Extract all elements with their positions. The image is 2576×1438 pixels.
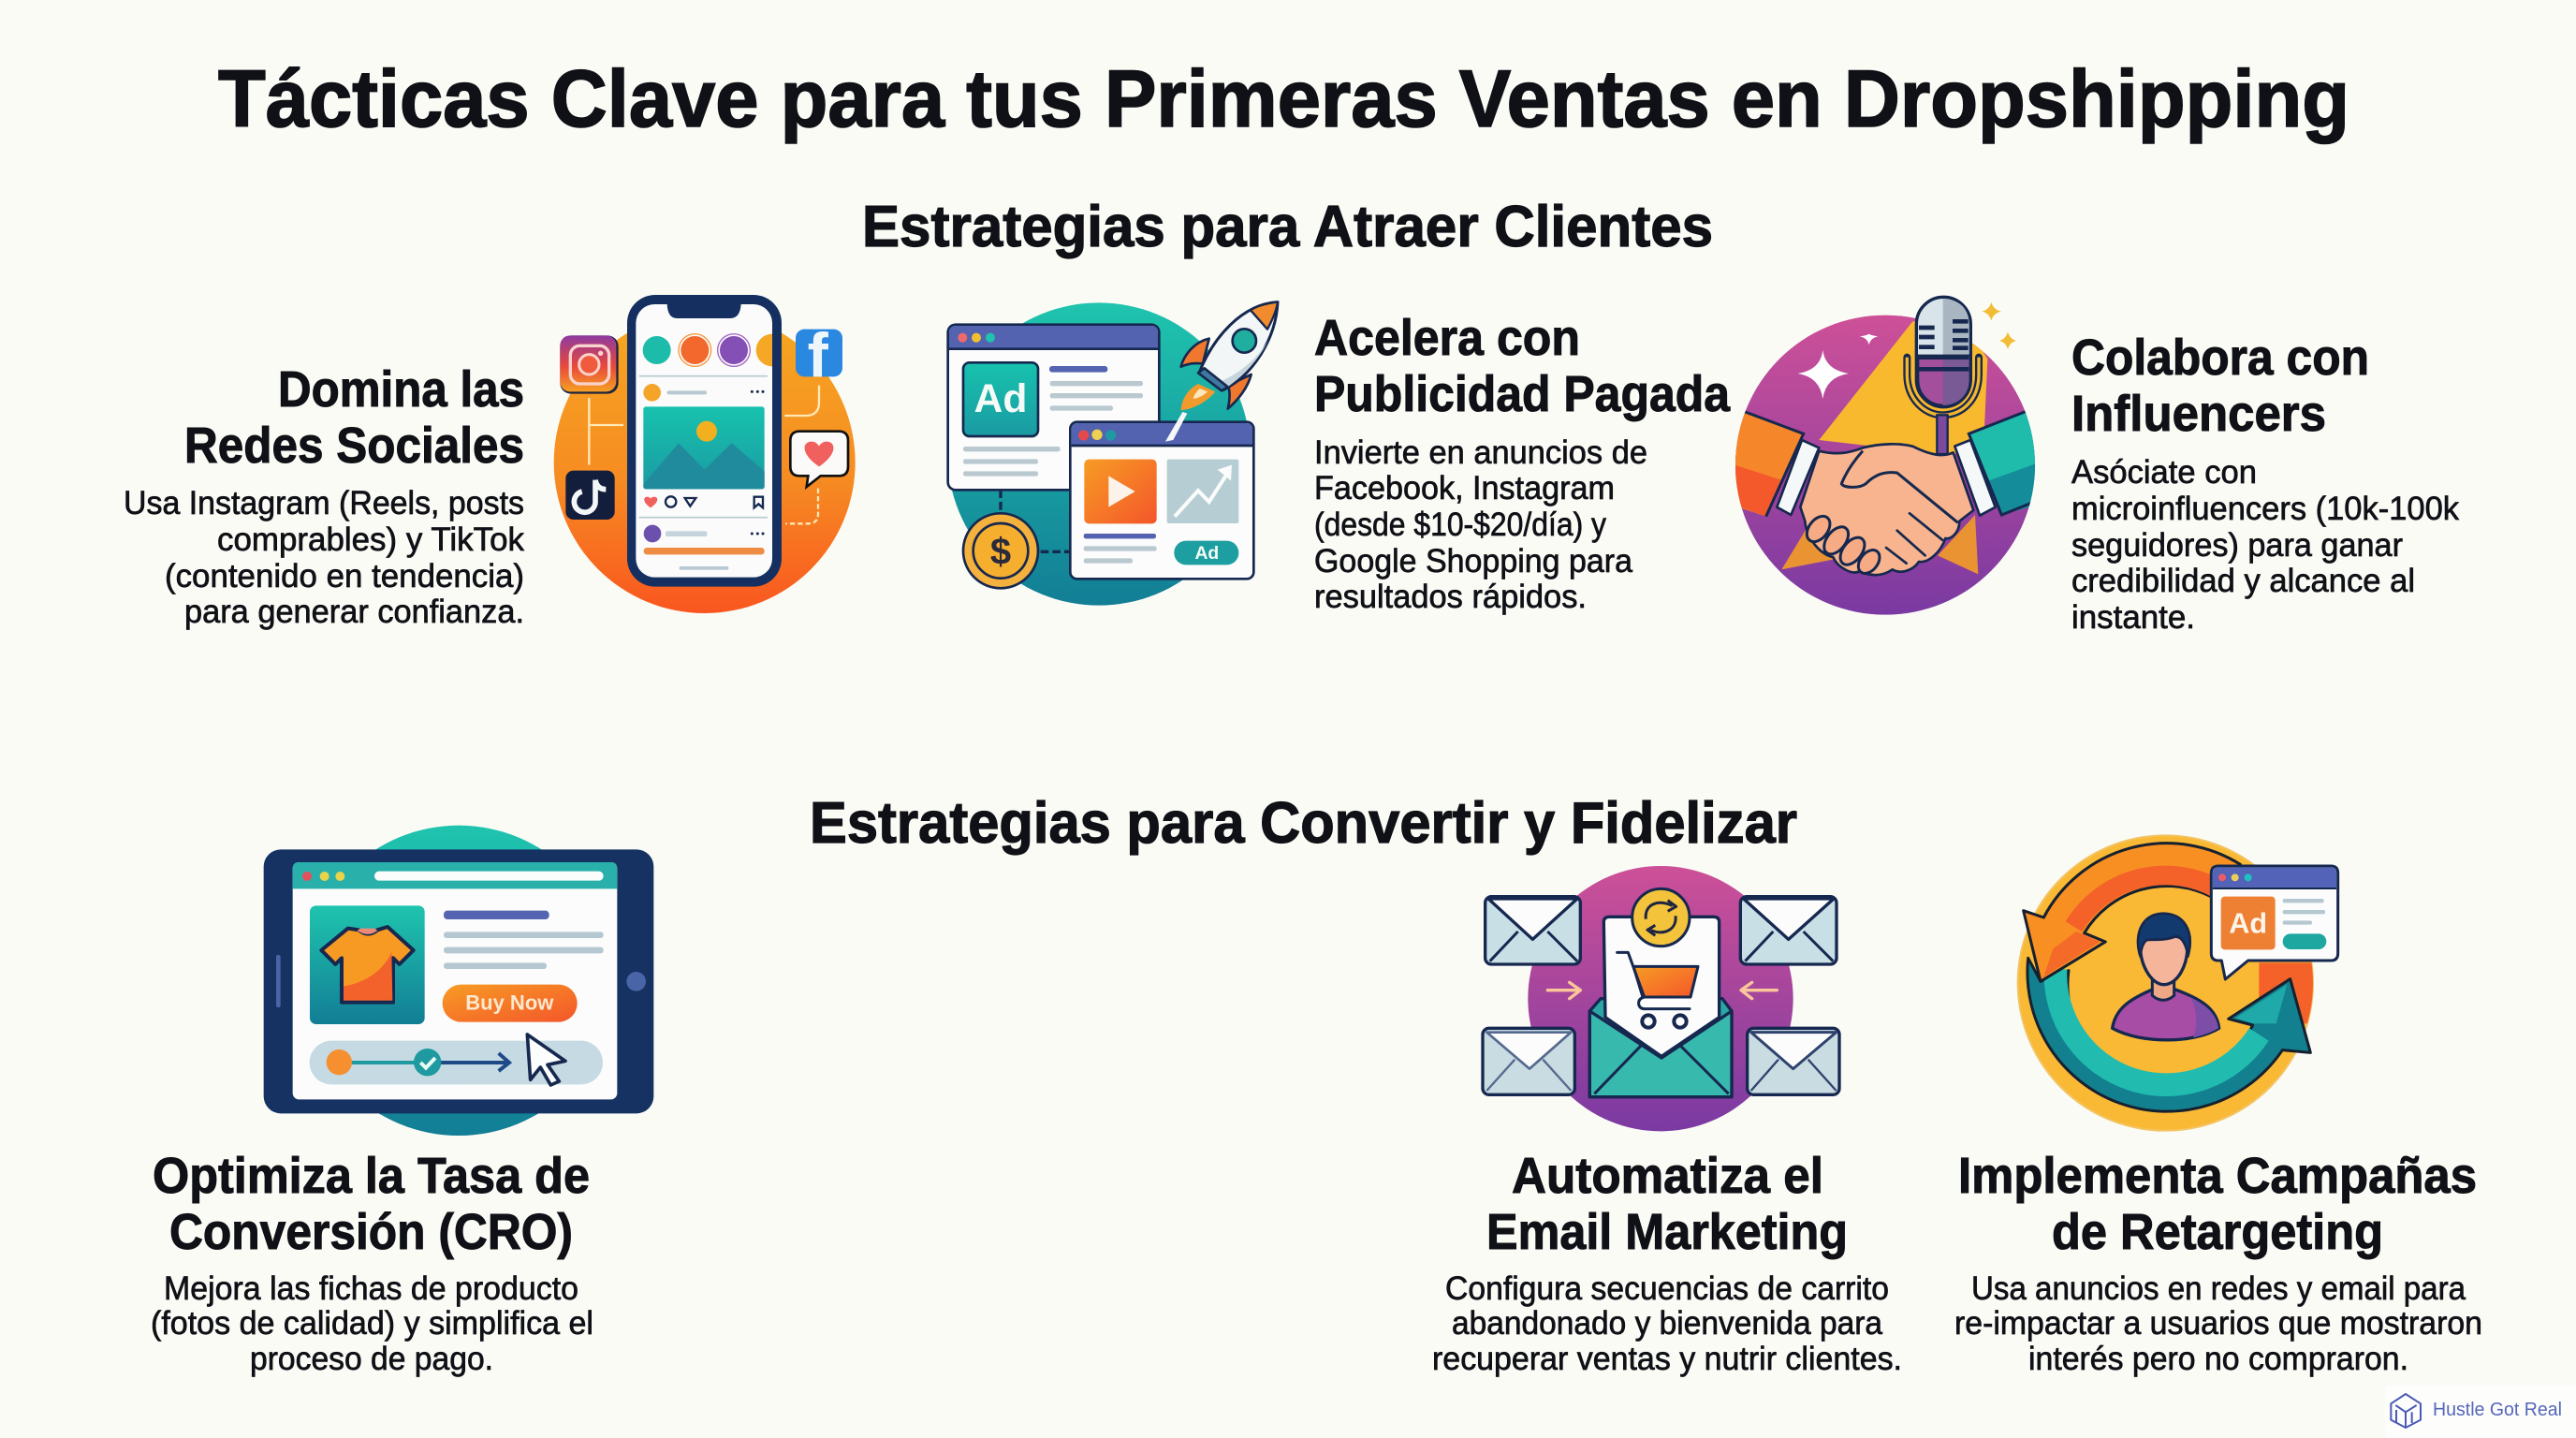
panel: publicidad pagada: [947, 302, 1731, 615]
body text: resultados rápidos.: [1314, 579, 1587, 615]
panel: retargeting: [1954, 835, 2482, 1377]
heading: [1486, 1148, 1848, 1260]
panel: influencers: [1729, 297, 2459, 636]
body text: (contenido en tendencia): [165, 558, 524, 594]
body text: (fotos de calidad) y simplifica el: [151, 1305, 593, 1342]
body text: para generar confianza.: [184, 594, 524, 630]
body text: Usa anuncios en redes y email para: [1971, 1270, 2466, 1307]
heading: de Retargeting: [2052, 1204, 2383, 1260]
heading: [2071, 330, 2369, 442]
icon: ad windows with rocket and coin: $: [990, 532, 1011, 573]
watermark text: Hustle Got Real: [2433, 1400, 2562, 1420]
icon: handshake with microphone: [1729, 297, 2041, 615]
body text: [124, 485, 524, 630]
icon: ad windows with rocket and coin: Ad: [1194, 544, 1219, 564]
section heading: atraer clientes: Estrategias para Atraer Clientes: [862, 195, 1713, 259]
body text: recuperar ventas y nutrir clientes.: [1432, 1341, 1902, 1377]
panel: email marketing: [1432, 866, 1902, 1377]
body text: [1432, 1270, 1902, 1377]
body text: (desde $10-$20/día) y: [1314, 506, 1606, 543]
body text: comprables) y TikTok: [217, 521, 524, 558]
heading: Optimiza la Tasa de: [153, 1148, 590, 1204]
icon: cube logo: [2391, 1394, 2421, 1428]
icon: retargeting loop around user with ad: [2018, 835, 2338, 1131]
body text: Facebook, Instagram: [1314, 470, 1615, 506]
heading: [1958, 1148, 2477, 1260]
heading: [1314, 310, 1731, 422]
body text: [1314, 434, 1647, 615]
heading: Automatiza el: [1512, 1148, 1823, 1204]
panel: optimiza CRO: [151, 826, 653, 1377]
icon: smartphone with social networks: f: [808, 321, 829, 390]
body text: Asóciate con: [2071, 454, 2257, 491]
heading: Email Marketing: [1486, 1204, 1848, 1260]
icon: smartphone with social networks: [554, 295, 856, 613]
icon: tablet with product page: Buy Now: [465, 991, 554, 1015]
heading: Influencers: [2071, 386, 2326, 442]
icon: retargeting loop around user with ad: Ad: [2229, 908, 2267, 940]
body text: Google Shopping para: [1314, 543, 1633, 580]
icon: tablet with product page: [264, 826, 653, 1136]
body text: re-impactar a usuarios que mostraron: [1954, 1305, 2482, 1342]
icon: ad windows with rocket and coin: [947, 302, 1278, 606]
heading: [184, 361, 524, 474]
heading: Implementa Campañas: [1958, 1148, 2477, 1204]
body text: [2071, 454, 2459, 636]
body text: seguidores) para ganar: [2071, 527, 2403, 564]
body text: credibilidad y alcance al: [2071, 563, 2415, 599]
section heading: convertir y fidelizar: Estrategias para Convertir y Fidelizar: [810, 791, 1797, 856]
body text: abandonado y bienvenida para: [1452, 1305, 1883, 1342]
heading: Conversión (CRO): [169, 1204, 573, 1260]
body text: microinfluencers (10k-100k: [2071, 491, 2459, 527]
icon: ad windows with rocket and coin: Ad: [974, 376, 1027, 421]
heading: Colabora con: [2071, 330, 2369, 386]
body text: Mejora las fichas de producto: [164, 1270, 578, 1307]
body text: instante.: [2071, 599, 2195, 636]
body text: Usa Instagram (Reels, posts: [124, 485, 524, 521]
body text: [151, 1270, 593, 1377]
body text: Configura secuencias de carrito: [1445, 1270, 1889, 1307]
heading: [153, 1148, 590, 1260]
heading: Domina las: [278, 361, 524, 418]
heading: Acelera con: [1314, 310, 1580, 366]
body text: proceso de pago.: [250, 1341, 493, 1377]
icon: envelopes with shopping cart: [1483, 866, 1839, 1131]
body text: interés pero no compraron.: [2028, 1341, 2408, 1377]
heading: Publicidad Pagada: [1314, 366, 1731, 422]
body text: Invierte en anuncios de: [1314, 434, 1647, 471]
panel: redes sociales: [124, 295, 856, 630]
body text: [1954, 1270, 2482, 1377]
title: Tácticas Clave para tus Primeras Ventas en Dropshipping: [218, 54, 2349, 144]
watermark: Hustle Got Real: [2385, 1386, 2576, 1438]
heading: Redes Sociales: [184, 418, 524, 474]
